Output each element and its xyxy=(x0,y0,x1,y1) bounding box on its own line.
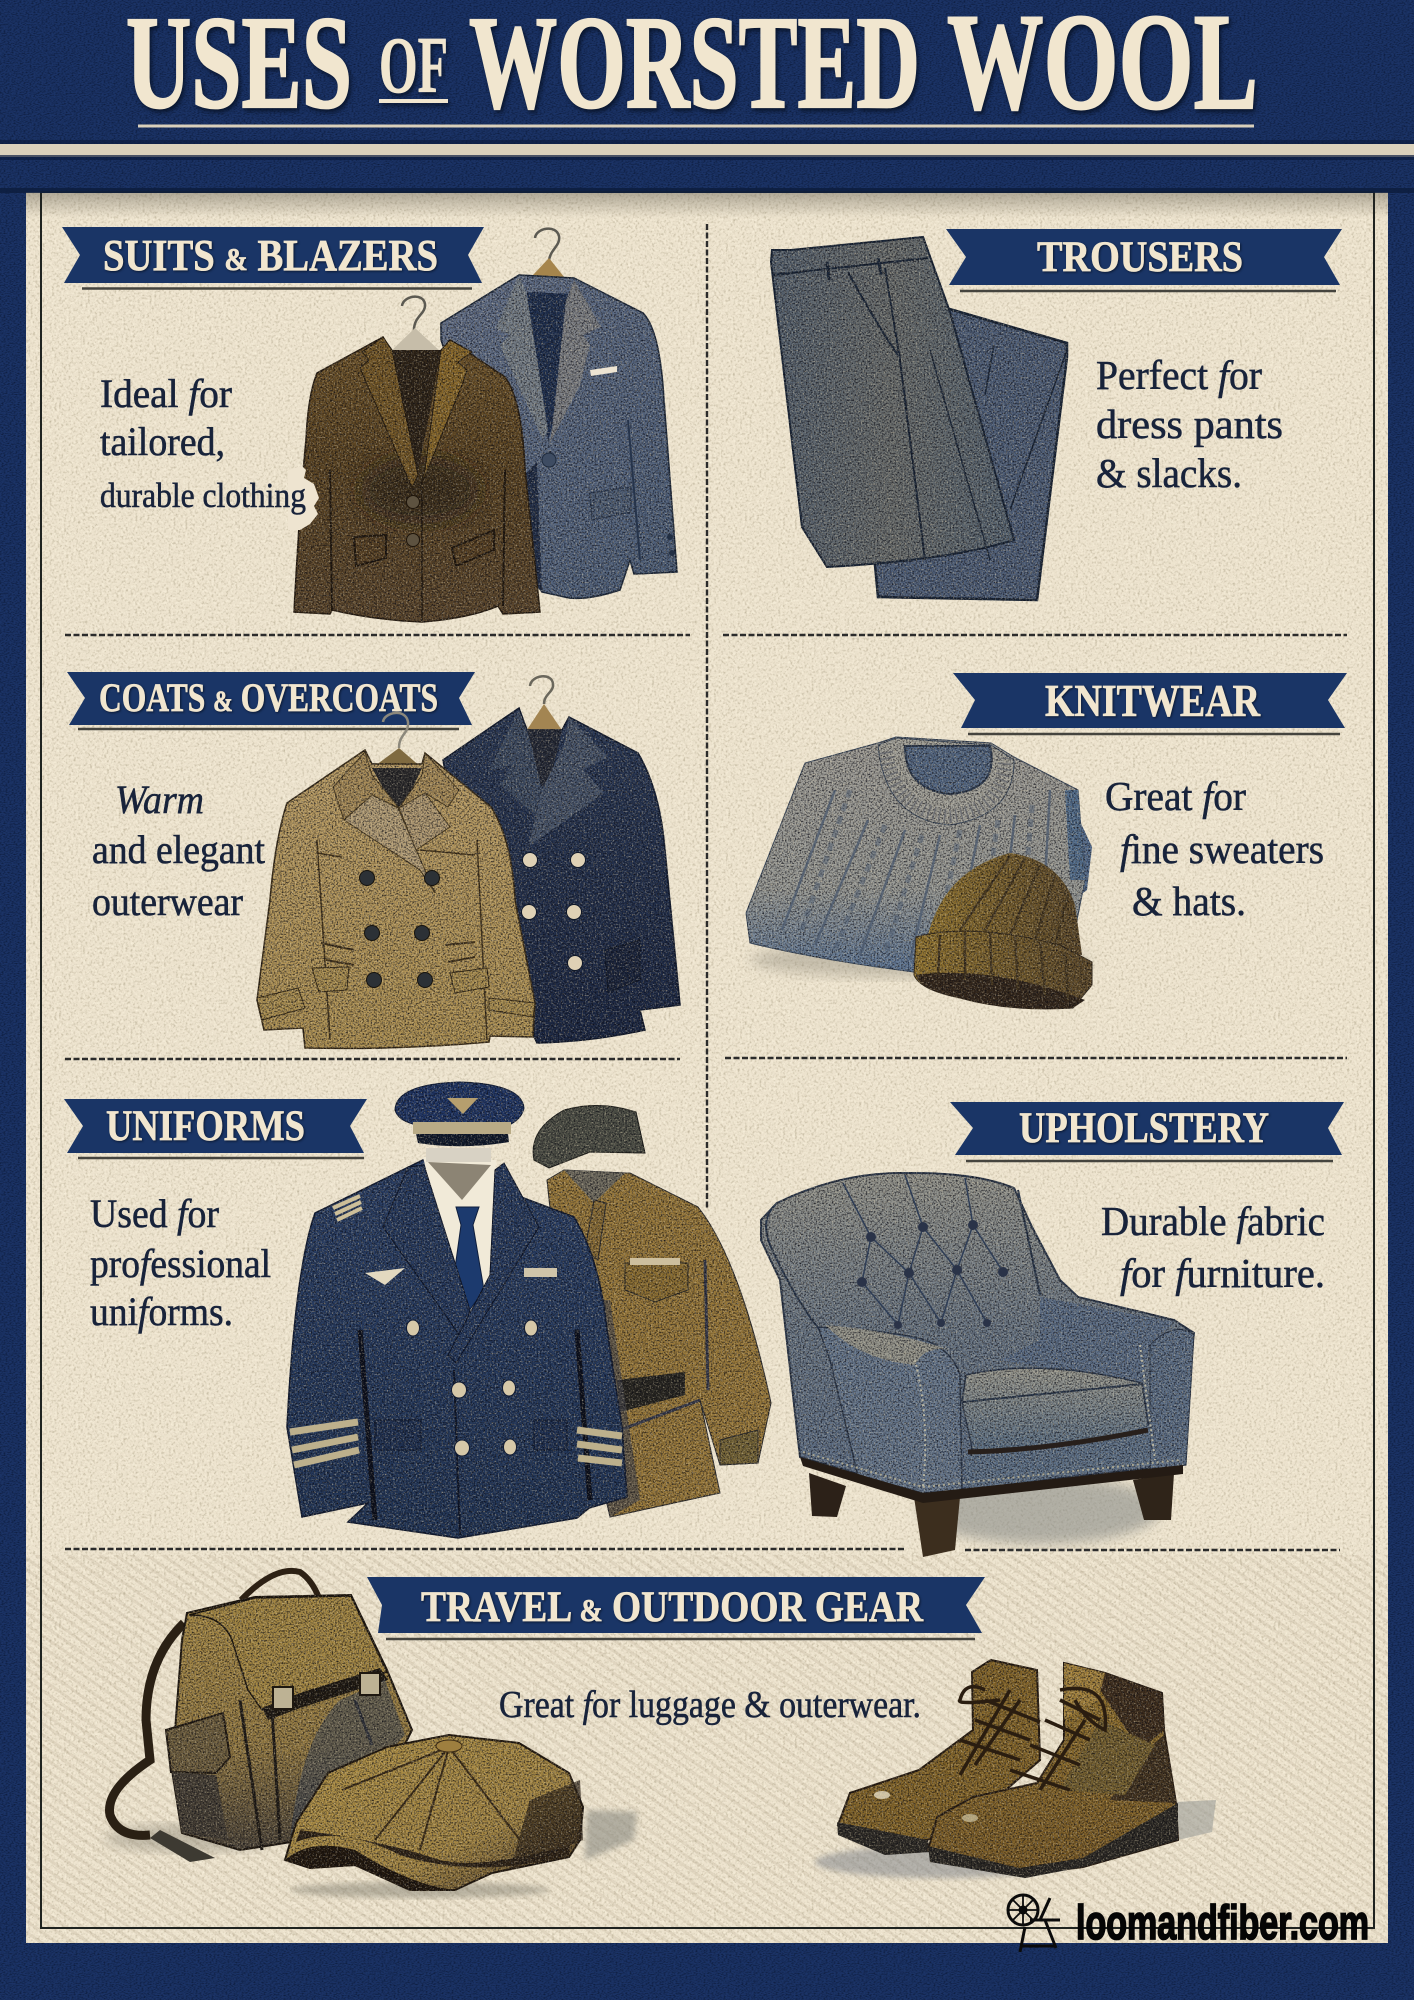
illustration: leather boots xyxy=(815,1660,1216,1878)
text: coats: and elegant xyxy=(92,827,265,872)
illustration: cable knit sweater xyxy=(746,737,1092,978)
text: suits: durable clothing xyxy=(100,476,306,515)
text: knitwear: & hats. xyxy=(1132,878,1246,924)
banner: knitwear: KNITWEAR xyxy=(1045,676,1260,726)
banner: trousers xyxy=(946,229,1342,291)
text: knitwear: Great for xyxy=(1105,773,1246,819)
title xyxy=(126,0,1258,138)
text: knitwear xyxy=(1105,773,1324,924)
illustration: pilot uniform with cap xyxy=(287,1082,627,1538)
text: upholstery: Durable fabric xyxy=(1101,1198,1325,1244)
illustration: brown blazer on hanger xyxy=(288,297,540,622)
text: travel: Great for luggage & outerwear. xyxy=(499,1684,921,1726)
illustration: flat cap xyxy=(285,1735,637,1898)
text: coats xyxy=(92,777,265,924)
section dividers xyxy=(65,224,1347,1550)
illustration: tufted armchair xyxy=(761,1173,1194,1557)
text: trousers: & slacks. xyxy=(1096,450,1242,496)
text: suits: Ideal for xyxy=(100,371,232,416)
icon: spinning wheel xyxy=(1008,1895,1060,1952)
text: suits: tailored, xyxy=(100,419,225,464)
text: coats: outerwear xyxy=(92,879,243,924)
logo: spinning wheel and site name xyxy=(1008,1895,1369,1952)
title: OF xyxy=(379,22,448,110)
illustration: khaki military uniform with beret xyxy=(533,1105,771,1517)
text: upholstery: for furniture. xyxy=(1120,1250,1325,1296)
text: uniforms: Used for xyxy=(90,1191,219,1236)
title rule xyxy=(138,124,1254,128)
banner: uniforms: UNIFORMS xyxy=(106,1103,305,1150)
text: uniforms: uniforms. xyxy=(90,1289,233,1334)
banner: travel and outdoor gear: TRAVEL & OUTDOOR GEAR xyxy=(421,1584,924,1631)
illustration: navy peacoat xyxy=(443,676,680,1043)
banner: upholstery: UPHOLSTERY xyxy=(1019,1105,1269,1152)
text: uniforms xyxy=(90,1191,271,1334)
text: coats: Warm xyxy=(115,777,204,822)
banner: uniforms xyxy=(64,1099,367,1158)
cream stripe under header xyxy=(0,144,1414,160)
illustration: tan coat xyxy=(257,713,535,1048)
illustration: canvas backpack xyxy=(105,1571,412,1862)
text: uniforms: professional xyxy=(90,1241,271,1286)
text: trousers: Perfect for xyxy=(1096,352,1262,398)
banner: coats and overcoats: COATS & OVERCOATS xyxy=(99,675,438,720)
banner: knitwear xyxy=(953,673,1347,734)
banner: travel and outdoor gear xyxy=(367,1577,985,1639)
illustration: knit hat xyxy=(914,853,1092,1009)
text: trousers xyxy=(1096,352,1283,496)
banner: suits and blazers xyxy=(62,227,484,288)
cream halo behind clothing text xyxy=(288,466,319,530)
illustration: folded trousers xyxy=(771,237,1067,600)
text: knitwear: fine sweaters xyxy=(1120,826,1324,872)
banner: trousers: TROUSERS xyxy=(1037,234,1243,281)
text: upholstery xyxy=(1101,1198,1325,1296)
banner: suits and blazers: SUITS & BLAZERS xyxy=(103,231,438,280)
text: suits xyxy=(100,371,306,515)
banner: upholstery xyxy=(950,1102,1344,1161)
text: trousers: dress pants xyxy=(1096,401,1283,447)
illustration: slate blazer on hanger xyxy=(441,229,677,598)
